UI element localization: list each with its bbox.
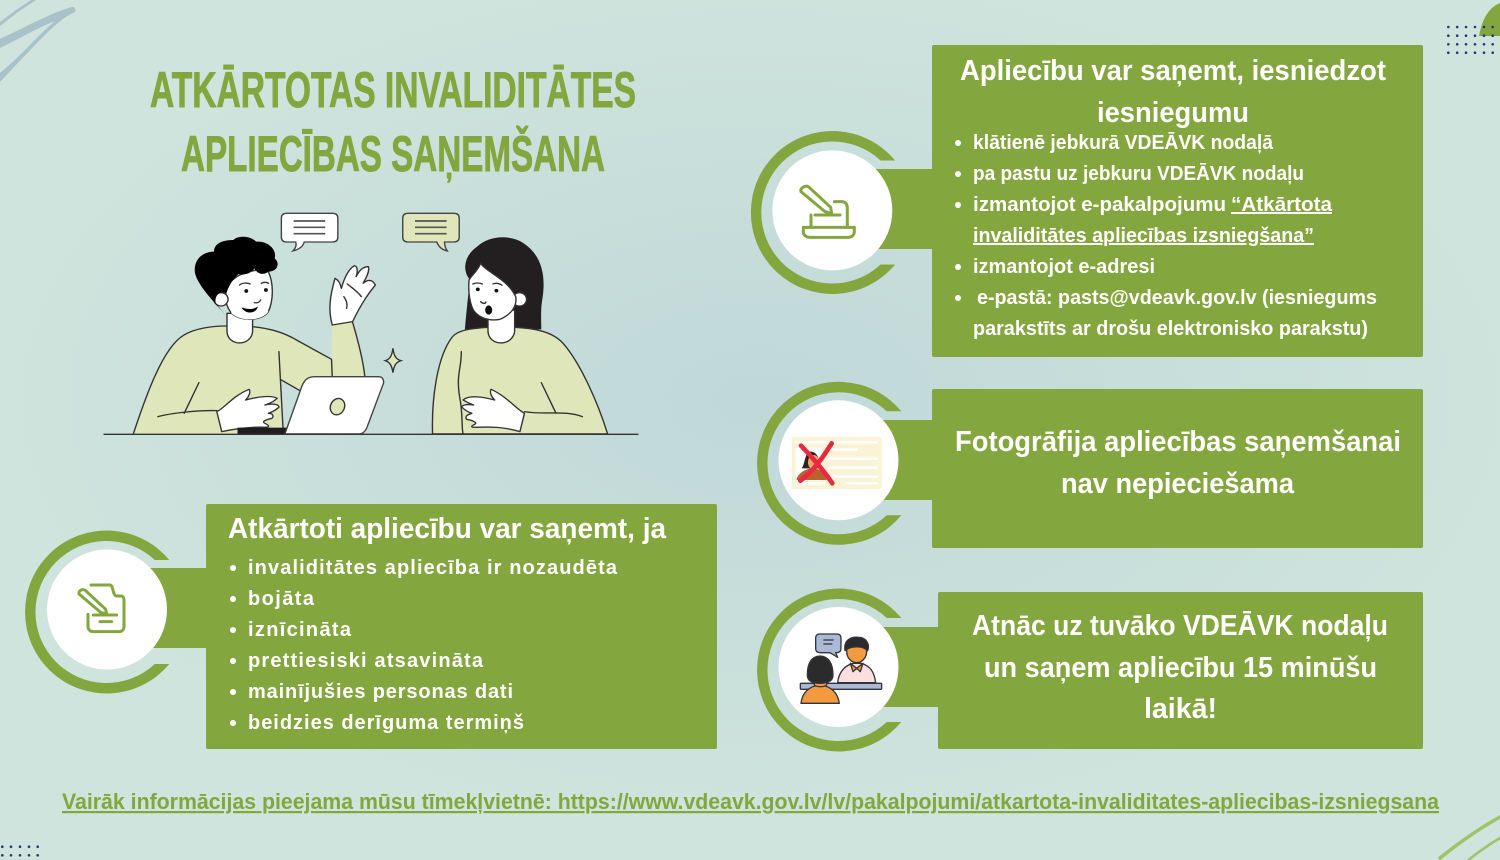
icon: hand signing on tray bbox=[801, 186, 854, 237]
callout: circle badge, photo bbox=[757, 382, 934, 545]
panel: how to submit bbox=[932, 45, 1423, 357]
list: submission methods: “Atkārtota bbox=[1231, 194, 1333, 216]
panel: when the certificate can be reissued bbox=[206, 504, 717, 749]
person: man bbox=[133, 237, 375, 434]
icon: document with pen bbox=[79, 585, 124, 632]
list: submission methods bbox=[955, 132, 1377, 340]
list: reissue conditions: beidzies derīguma termiņš bbox=[248, 712, 524, 734]
sparkle bbox=[385, 348, 401, 373]
title: APLIECĪBAS SAŅEMŠANA bbox=[181, 125, 605, 182]
panel: photo not needed: Fotogrāfija apliecības saņemšanai bbox=[955, 426, 1401, 458]
footer link: Vairāk informācijas pieejama mūsu tīmekļvietnē: https://www.vdeavk.gov.lv/lv/pakalpojumi/atkartota-invaliditates-apliecibas-izsniegsana bbox=[62, 789, 1440, 814]
icon: ID card crossed out bbox=[792, 437, 882, 489]
decoration: bottom-right strokes bbox=[1440, 817, 1500, 860]
list: reissue conditions: invaliditātes apliecība ir nozaudēta bbox=[248, 557, 618, 579]
decoration: top-left brush strokes bbox=[0, 0, 76, 82]
list: submission methods: parakstīts ar drošu elektronisko parakstu) bbox=[973, 318, 1368, 340]
speech bubble: white bbox=[281, 213, 338, 251]
table line bbox=[104, 432, 638, 436]
list: submission methods: e-pastā: pasts@vdeavk.gov.lv (iesniegums bbox=[977, 287, 1377, 309]
list: submission methods: pa pastu uz jebkuru VDEĀVK nodaļu bbox=[973, 163, 1304, 185]
list: submission methods: izmantojot e-pakalpojumu bbox=[973, 194, 1226, 216]
icon: customer at service desk bbox=[800, 634, 882, 703]
list: submission methods: izmantojot e-adresi bbox=[973, 256, 1155, 278]
list: reissue conditions: mainījušies personas dati bbox=[248, 681, 513, 703]
panel: photo not needed bbox=[932, 389, 1423, 548]
panel: visit office: un saņem apliecību 15 minūšu bbox=[984, 652, 1377, 684]
decoration: bottom-left dots bbox=[1, 845, 39, 857]
panel: visit office bbox=[938, 592, 1423, 749]
speech bubble: green bbox=[403, 213, 459, 251]
callout: circle badge, left bbox=[25, 530, 208, 694]
title bbox=[150, 62, 636, 182]
callout: circle badge, top right bbox=[751, 131, 934, 294]
decoration: top-right blob and dots bbox=[1447, 3, 1500, 54]
panel: visit office: Atnāc uz tuvāko VDEĀVK nodaļu bbox=[972, 610, 1388, 642]
panel: visit office: laikā! bbox=[1144, 693, 1217, 725]
heading: submit application bbox=[960, 55, 1386, 129]
title: ATKĀRTOTAS INVALIDITĀTES bbox=[150, 62, 636, 118]
callout: circle badge, office visit bbox=[757, 588, 940, 752]
list: reissue conditions bbox=[230, 557, 618, 734]
list: reissue conditions: bojāta bbox=[248, 588, 315, 610]
list: reissue conditions: iznīcināta bbox=[248, 619, 352, 641]
list: submission methods: klātienē jebkurā VDEĀVK nodaļā bbox=[973, 132, 1274, 154]
heading: reissue conditions: Atkārtoti apliecību var saņemt, ja bbox=[228, 513, 667, 545]
list: submission methods: invaliditātes apliecības izsniegšana” bbox=[973, 225, 1314, 247]
heading: submit application: iesniegumu bbox=[1097, 97, 1249, 129]
list: reissue conditions: prettiesiski atsavināta bbox=[248, 650, 484, 672]
panel: photo not needed: nav nepieciešama bbox=[1061, 468, 1295, 500]
laptop bbox=[238, 377, 384, 434]
illustration: two people talking at a laptop bbox=[104, 213, 638, 434]
person: woman bbox=[432, 237, 608, 434]
heading: submit application: Apliecību var saņemt, iesniedzot bbox=[960, 55, 1386, 87]
